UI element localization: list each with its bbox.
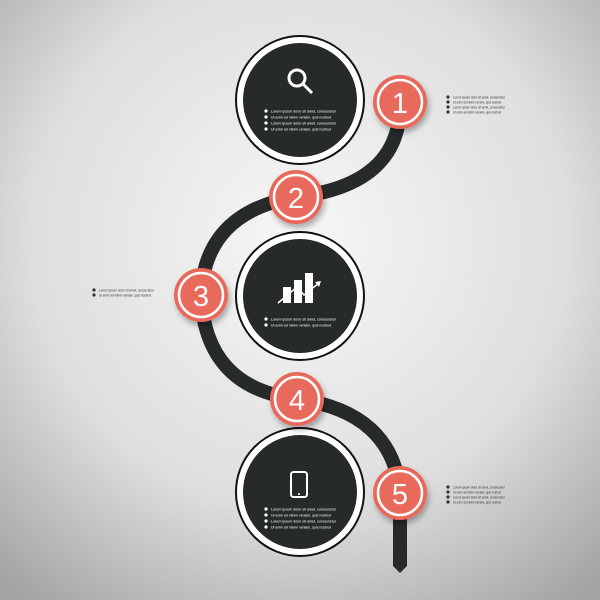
marker 5 — [373, 466, 427, 520]
side text: step 5: Lorem ipsum dolor sit amet, consectetur — [453, 496, 506, 500]
side text: step 1: Ut enim ad minim veniam, quis nostrud — [453, 100, 501, 104]
text block: step 5 — [264, 506, 337, 530]
side text: step 1: Lorem ipsum dolor sit amet, consectetur — [453, 106, 506, 110]
text block: step 1: Ut enim ad minim veniam, quis nostrud — [271, 114, 331, 120]
marker 4: 4 — [289, 385, 305, 417]
side text: step 3: Ut enim ad minim veniam, quis nostrud — [99, 294, 151, 298]
side text: step 5: Lorem ipsum dolor sit amet, consectetur — [453, 486, 506, 490]
text block: step 1: Ut enim ad minim veniam, quis nostrud — [271, 126, 331, 132]
side text: step 1 — [446, 95, 506, 114]
side text: step 1: Ut enim ad minim veniam, quis nostrud — [453, 110, 501, 114]
marker 2: 2 — [288, 183, 304, 215]
text block: step 5: Lorem ipsum dolor sit amet, consectetur — [271, 506, 337, 512]
side text: step 1: Lorem ipsum dolor sit amet, consectetur — [453, 96, 506, 100]
marker 1 — [373, 75, 427, 129]
text block: step 5: Lorem ipsum dolor sit amet, consectetur — [271, 518, 337, 524]
marker 2 — [269, 170, 323, 224]
side text: step 5: Ut enim ad minim veniam, quis nostrud — [453, 500, 501, 504]
side text: step 3 — [92, 288, 155, 298]
text block: step 1 — [264, 108, 337, 132]
panel: step 3 chart — [236, 232, 364, 360]
text block: step 3 — [264, 316, 337, 328]
panel: step 1 search — [236, 36, 364, 164]
timeline path — [201, 108, 407, 573]
marker 3 — [174, 268, 228, 322]
marker 4 — [270, 372, 324, 426]
side text: step 5: Ut enim ad minim veniam, quis nostrud — [453, 490, 501, 494]
icon: bar chart — [278, 273, 321, 303]
side text: step 5 — [446, 485, 506, 504]
text block: step 5: Ut enim ad minim veniam, quis nostrud — [271, 524, 331, 530]
text block: step 5: Ut enim ad minim veniam, quis nostrud — [271, 512, 331, 518]
icon: phone — [291, 472, 307, 497]
marker 3: 3 — [193, 281, 209, 313]
marker 5: 5 — [392, 479, 408, 511]
side text: step 3: Lorem ipsum dolor sit amet, consectetur — [99, 288, 155, 292]
text block: step 3: Lorem ipsum dolor sit amet, consectetur — [271, 316, 337, 322]
panel: step 5 mobile — [236, 428, 364, 556]
text block: step 3: Ut enim ad minim veniam, quis nostrud — [271, 322, 331, 328]
marker 1: 1 — [392, 88, 408, 120]
icon: magnifier — [289, 70, 312, 93]
text block: step 1: Lorem ipsum dolor sit amet, consectetur — [271, 108, 337, 114]
text block: step 1: Lorem ipsum dolor sit amet, consectetur — [271, 120, 337, 126]
